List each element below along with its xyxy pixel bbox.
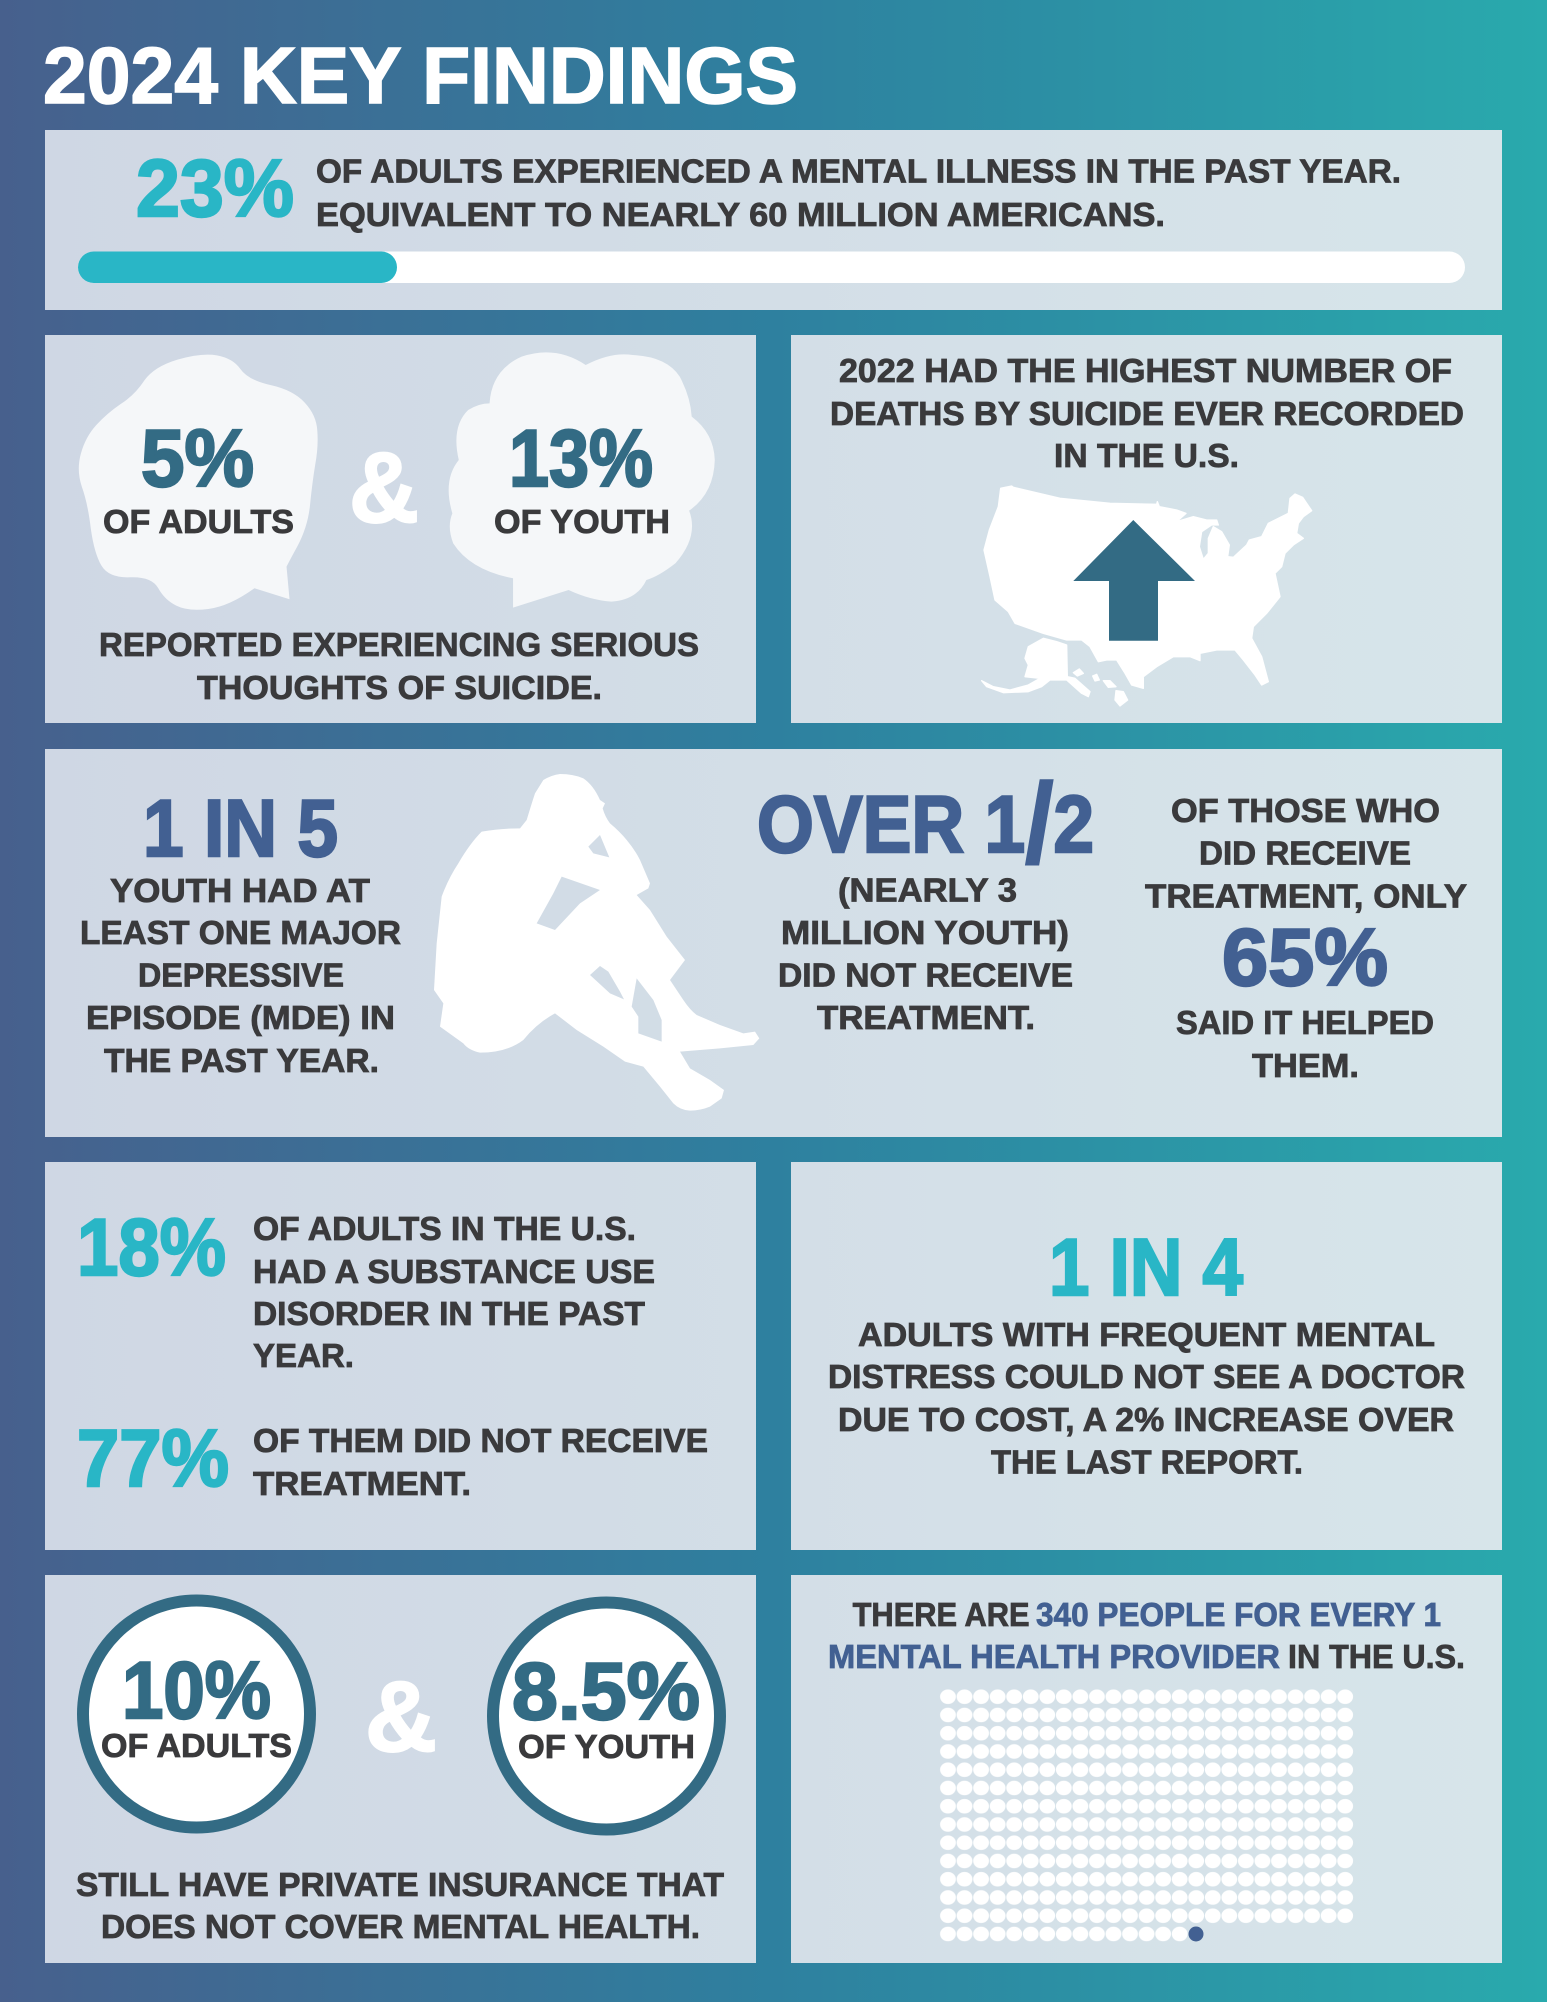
- text: mental illness description: OF ADULTS EXPERIENCED A MENTAL ILLNESS IN THE PAST YEAR.: [316, 152, 1401, 190]
- text: mental illness description: EQUIVALENT TO NEARLY 60 MILLION AMERICANS.: [316, 196, 1165, 233]
- progress bar: [78, 252, 1465, 283]
- text: frequent mental distress: THE LAST REPORT.: [991, 1444, 1303, 1480]
- stat: over 1/2 untreated: /: [1025, 761, 1053, 886]
- caption: private insurance: [76, 1866, 724, 1945]
- stat: 13% of youth: 13%: [509, 414, 653, 504]
- ampersand: &: [365, 1661, 437, 1773]
- stat: 5% of adults: 5%: [141, 414, 254, 504]
- panel: deaths by suicide: [791, 335, 1502, 723]
- text: substance use disorder: DISORDER IN THE PAST: [253, 1295, 645, 1332]
- stat: 65% said treatment helped: 65%: [1222, 913, 1388, 1003]
- text: substance use disorder: [253, 1210, 655, 1374]
- stat circle: 8.5% of youth: 8.5%: [512, 1647, 700, 1737]
- stat: 5% of adults: [103, 414, 294, 540]
- panel: mental illness: [45, 130, 1502, 310]
- stat: 1 in 5 youth: LEAST ONE MAJOR: [80, 914, 401, 951]
- text: did not receive treatment: OF THEM DID NOT RECEIVE: [253, 1422, 708, 1459]
- stat circle: 10% of adults: 10%: [122, 1646, 271, 1736]
- heading: highest number of deaths: 2022 HAD THE HIGHEST NUMBER OF: [839, 352, 1452, 389]
- panel: suicidal thoughts: [45, 335, 756, 723]
- text: frequent mental distress: DUE TO COST, A 2% INCREASE OVER: [838, 1401, 1454, 1438]
- stat: 1 in 4: 1 IN 4: [1049, 1223, 1243, 1313]
- stat: over 1/2 untreated: [757, 761, 1094, 1036]
- stat circle: 10% of adults: OF ADULTS: [101, 1727, 292, 1764]
- stat: 65% said treatment helped: [1145, 792, 1467, 1084]
- stat: over 1/2 untreated: DID NOT RECEIVE: [778, 957, 1073, 994]
- text: frequent mental distress: ADULTS WITH FREQUENT MENTAL: [858, 1316, 1435, 1353]
- stat: 65% said treatment helped: OF THOSE WHO: [1171, 792, 1440, 829]
- stat: over 1/2 untreated: 2: [1053, 780, 1094, 870]
- stat: 1 in 5 youth: EPISODE (MDE) IN: [86, 999, 395, 1036]
- stat: 1 in 5 youth: DEPRESSIVE: [138, 957, 344, 994]
- stat: 1 in 5 youth: [80, 784, 401, 1079]
- text: substance use disorder: YEAR.: [253, 1337, 354, 1374]
- stat: 13% of youth: OF YOUTH: [494, 503, 670, 540]
- stat: over 1/2 untreated: MILLION YOUTH): [781, 914, 1069, 951]
- stat circle: 8.5% of youth: OF YOUTH: [518, 1728, 695, 1765]
- panel: youth depression: [45, 749, 1502, 1137]
- stat: 23%: 23%: [136, 144, 294, 234]
- panel: cost of care: [791, 1162, 1502, 1550]
- arrow: upward: [1073, 520, 1195, 641]
- stat: 65% said treatment helped: SAID IT HELPED: [1176, 1004, 1434, 1041]
- heading: 340 people per provider: 340 PEOPLE FOR EVERY 1: [1036, 1596, 1441, 1633]
- heading: 340 people per provider: MENTAL HEALTH PROVIDER: [828, 1638, 1280, 1675]
- text: did not receive treatment: [253, 1422, 708, 1502]
- stat: 1 in 5 youth: THE PAST YEAR.: [104, 1042, 379, 1079]
- text: frequent mental distress: DISTRESS COULD NOT SEE A DOCTOR: [828, 1358, 1465, 1395]
- heading: highest number of deaths: DEATHS BY SUICIDE EVER RECORDED: [830, 395, 1464, 432]
- icon: adults speech bubble: [79, 355, 318, 610]
- stat: over 1/2 untreated: TREATMENT.: [817, 999, 1035, 1036]
- icon: seated person silhouette: [434, 774, 759, 1111]
- stat: 65% said treatment helped: DID RECEIVE: [1199, 834, 1411, 872]
- stat: 13% of youth: [494, 414, 670, 540]
- heading: highest number of deaths: IN THE U.S.: [1054, 437, 1239, 474]
- icon: US map: [982, 486, 1312, 706]
- caption: serious thoughts of suicide: THOUGHTS OF SUICIDE.: [197, 669, 602, 706]
- stat: 1 in 5 youth: YOUTH HAD AT: [110, 872, 370, 909]
- text: substance use disorder: HAD A SUBSTANCE USE: [253, 1253, 655, 1290]
- heading: 340 people per provider: THERE ARE: [853, 1596, 1030, 1633]
- panel: insurance coverage: [45, 1575, 756, 1963]
- caption: private insurance: STILL HAVE PRIVATE INSURANCE THAT: [76, 1866, 724, 1903]
- stat: 65% said treatment helped: THEM.: [1252, 1047, 1359, 1084]
- text: substance use disorder: OF ADULTS IN THE U.S.: [253, 1210, 636, 1247]
- stat: 65% said treatment helped: TREATMENT, ONLY: [1145, 878, 1467, 915]
- ampersand: &: [349, 432, 419, 544]
- stat circle: 10% of adults: [83, 1600, 310, 1828]
- heading: highest number of deaths: [830, 352, 1464, 474]
- heading: 340 people per provider: [828, 1596, 1465, 1675]
- stat: 1 in 5 youth: 1 IN 5: [143, 784, 338, 874]
- text: mental illness description: [316, 152, 1401, 233]
- caption: serious thoughts of suicide: REPORTED EXPERIENCING SERIOUS: [99, 626, 699, 663]
- caption: private insurance: DOES NOT COVER MENTAL HEALTH.: [101, 1908, 700, 1945]
- dot grid: people per provider: [940, 1688, 1353, 1943]
- text: did not receive treatment: TREATMENT.: [253, 1465, 471, 1502]
- stat circle: 8.5% of youth: [493, 1602, 720, 1830]
- stat: 18%: 18%: [77, 1203, 226, 1293]
- title: 2024 KEY FINDINGS: [43, 31, 798, 120]
- stat: over 1/2 untreated: (NEARLY 3: [838, 872, 1017, 908]
- caption: serious thoughts of suicide: [99, 626, 699, 706]
- panel: provider ratio: [791, 1575, 1502, 1963]
- panel: substance use: [45, 1162, 756, 1550]
- stat: over 1/2 untreated: OVER 1: [757, 780, 1054, 870]
- stat: 77%: 77%: [77, 1414, 229, 1504]
- heading: 340 people per provider: IN THE U.S.: [1288, 1638, 1465, 1675]
- stat: 5% of adults: OF ADULTS: [103, 503, 294, 540]
- text: frequent mental distress: [828, 1316, 1465, 1480]
- icon: youth speech bubble: [449, 352, 715, 608]
